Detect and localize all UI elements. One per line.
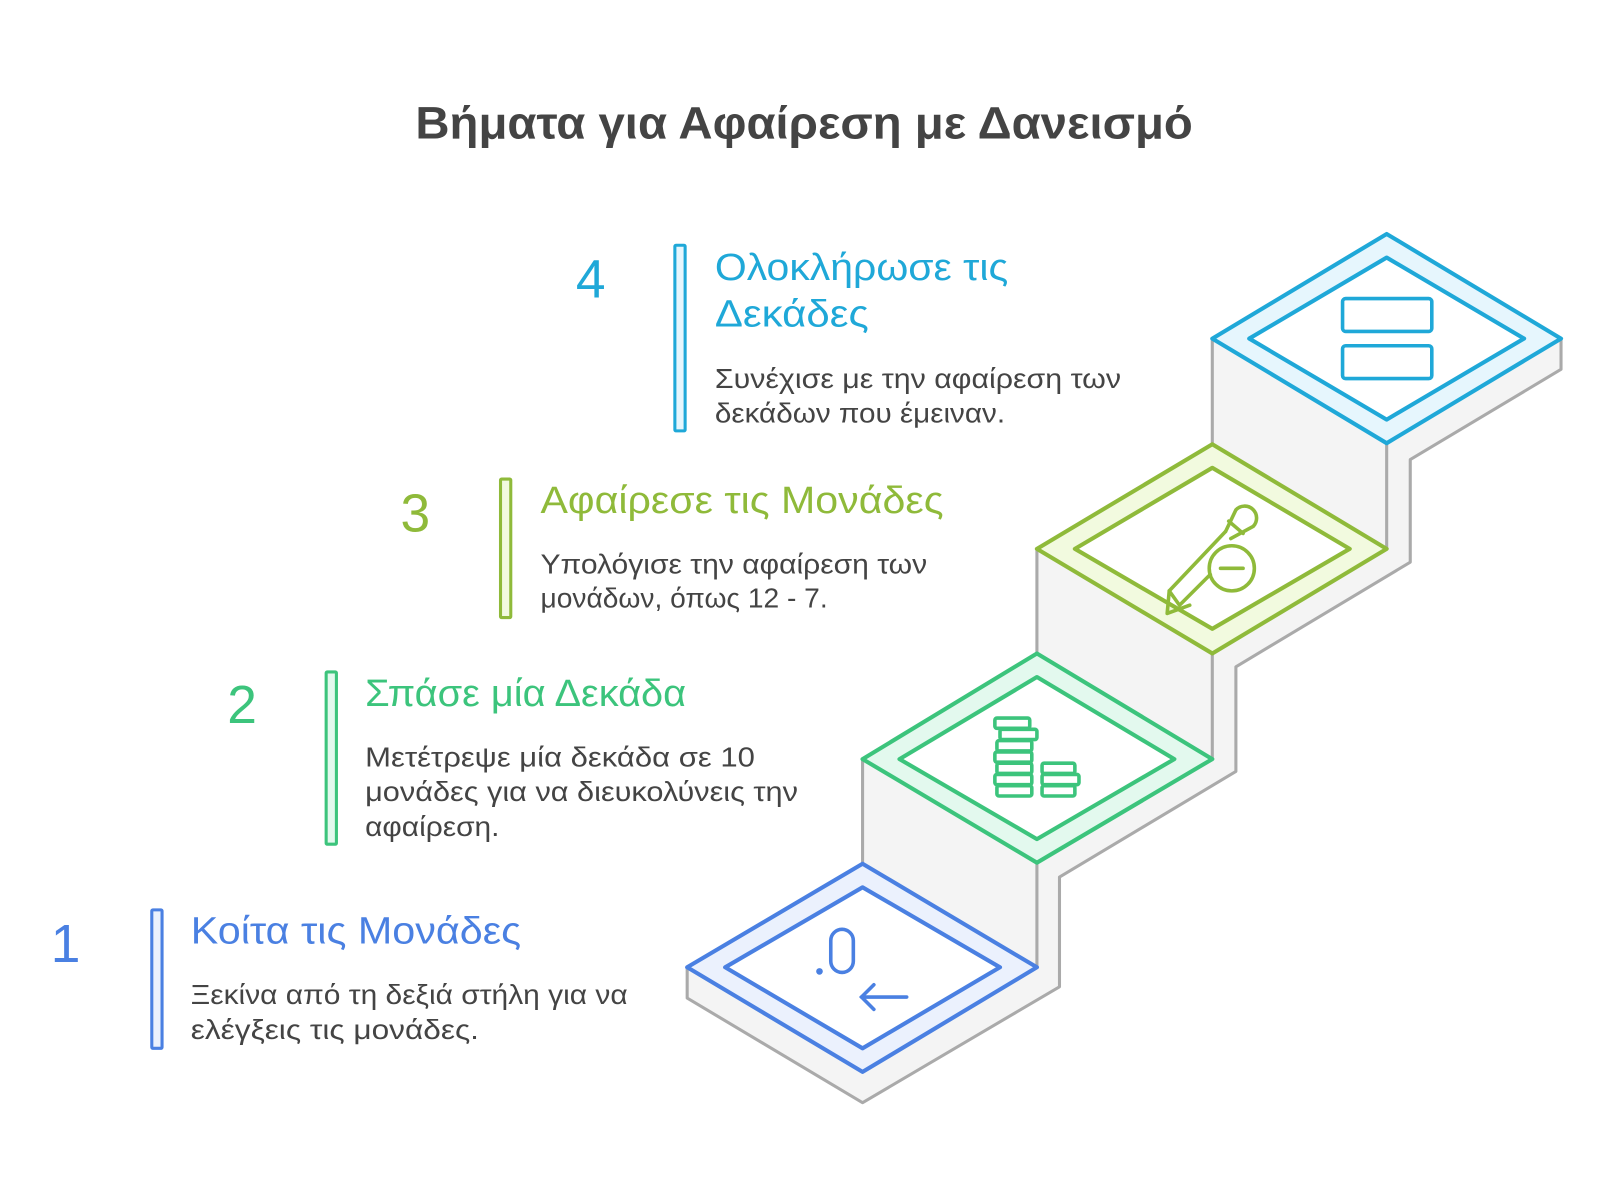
step 1 text: Ξεκίνα από τη δεξιά στήλη για να xyxy=(191,979,628,1010)
step 2 text: 2 xyxy=(227,676,257,735)
step 1 platform xyxy=(687,864,1037,1072)
step 4 text xyxy=(576,245,1121,431)
step 4 text: Δεκάδες xyxy=(715,293,869,335)
step 1 text xyxy=(51,910,628,1048)
step 1 text: Κοίτα τις Μονάδες xyxy=(191,911,521,953)
step 4 text: δεκάδων που έμειναν. xyxy=(715,398,1005,429)
step 3 text xyxy=(401,479,944,618)
step 4 text: 4 xyxy=(576,251,606,310)
step 2 text: αφαίρεση. xyxy=(365,811,499,842)
step 3 text: Αφαίρεσε τις Μονάδες xyxy=(541,480,944,522)
icon: coin stacks xyxy=(995,718,1079,796)
step 3 platform xyxy=(1037,444,1387,653)
step 3 text: Υπολόγισε την αφαίρεση των xyxy=(541,548,927,579)
step 3 text: μονάδων, όπως 12 - 7. xyxy=(541,582,828,613)
step 4 text: Ολοκλήρωσε τις xyxy=(715,247,1008,289)
step 2 platform xyxy=(863,653,1212,863)
title: Βήματα για Αφαίρεση με Δανεισμό xyxy=(415,98,1193,149)
step 4 text: Συνέχισε με την αφαίρεση των xyxy=(715,363,1121,394)
icon: pencil with minus xyxy=(1167,506,1257,613)
step 3 text: 3 xyxy=(401,484,430,543)
step 2 text xyxy=(227,672,798,844)
step 4 platform xyxy=(1212,234,1561,443)
step 2 text: μονάδες για να διευκολύνεις την xyxy=(365,776,798,807)
icon: decimal zero with arrow xyxy=(818,929,907,1009)
step 1 text: 1 xyxy=(51,915,80,974)
step 2 text: Σπάσε μία Δεκάδα xyxy=(365,673,686,715)
step 2 text: Μετέτρεψε μία δεκάδα σε 10 xyxy=(365,741,755,772)
step 1 text: ελέγξεις τις μονάδες. xyxy=(191,1014,479,1045)
staircase body xyxy=(687,234,1561,1103)
icon: two rows xyxy=(1343,299,1432,379)
